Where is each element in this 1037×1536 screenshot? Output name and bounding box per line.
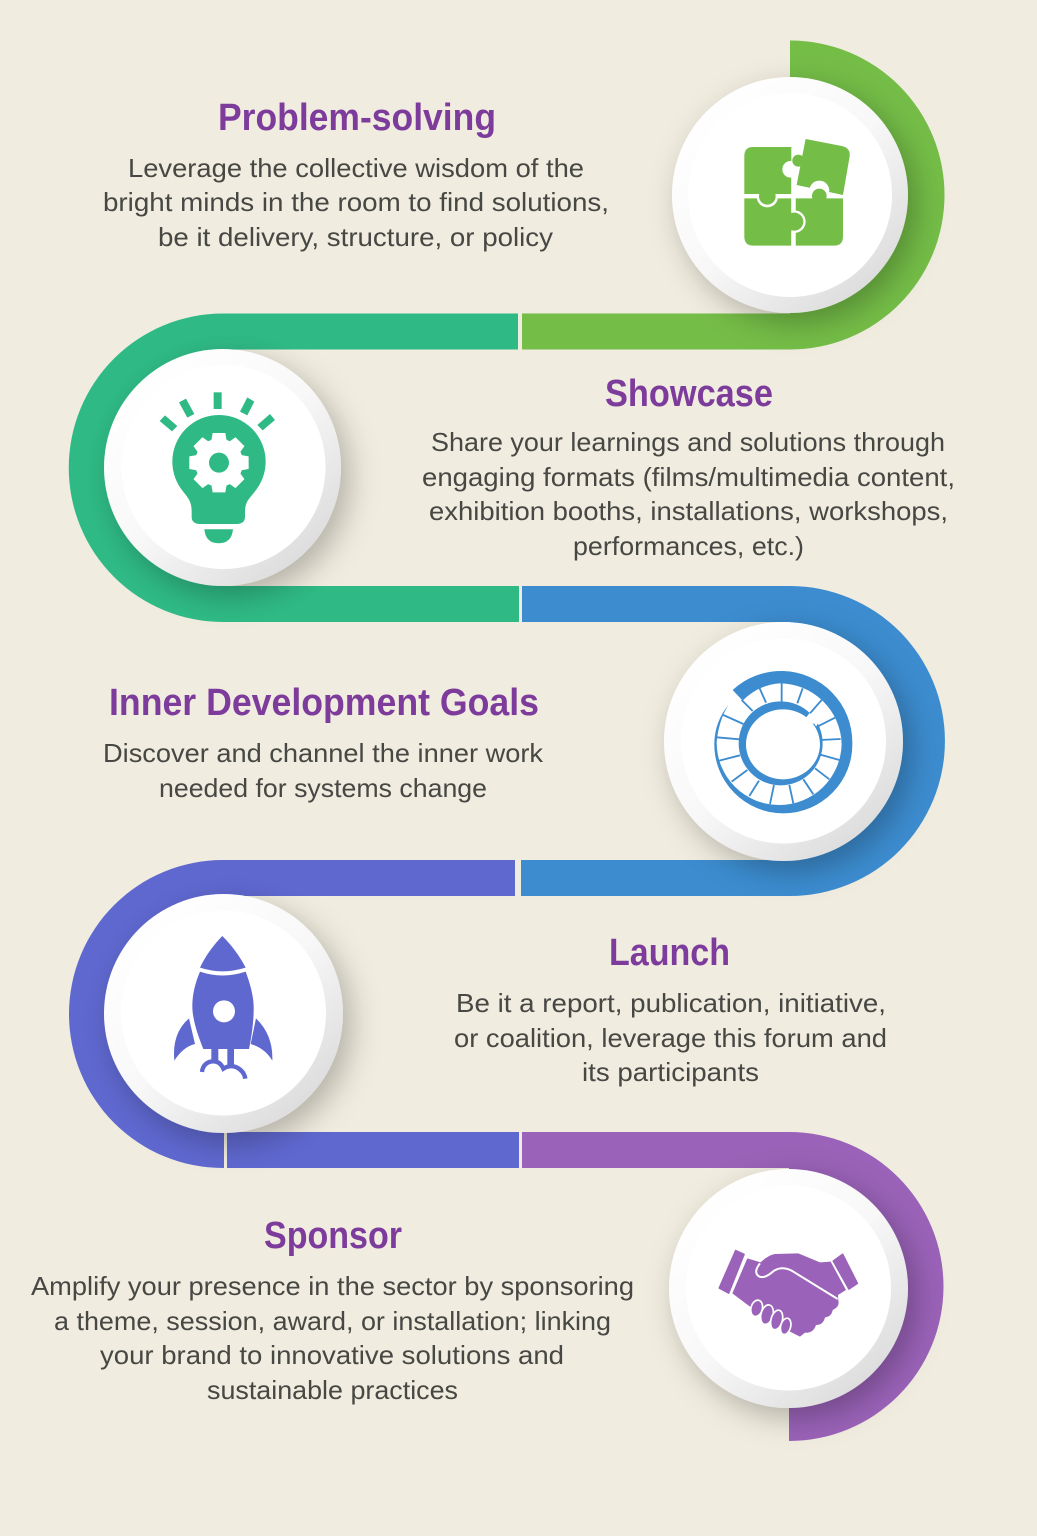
body: sponsor: [31, 1271, 634, 1405]
body: sponsor: Amplify your presence in the sector by sponsoring: [31, 1271, 634, 1301]
body: showcase: Share your learnings and solutions through: [431, 427, 945, 457]
node: sponsor circle: [669, 1169, 908, 1408]
body: showcase: performances, etc.): [573, 531, 804, 561]
body: showcase: [422, 427, 955, 561]
body: problem-solving: Leverage the collective wisdom of the: [128, 153, 584, 183]
text block: launch: [454, 932, 887, 1087]
body: launch: its participants: [582, 1057, 759, 1087]
heading: problem-solving: Problem-solving: [218, 97, 496, 139]
heading: showcase: Showcase: [605, 373, 773, 415]
body: problem-solving: [103, 153, 609, 252]
node: inner development goals circle: [664, 622, 903, 861]
path segment: blue: [521, 586, 945, 896]
body: inner development goals: [103, 738, 544, 803]
path segment: green: [522, 40, 945, 350]
heading: launch: Launch: [609, 932, 730, 974]
node: launch circle: [104, 894, 343, 1133]
path segment: purple: [522, 1132, 944, 1441]
path segment: indigo: [69, 860, 519, 1168]
body: launch: [454, 988, 887, 1087]
body: inner development goals: Discover and channel the inner work: [103, 738, 544, 768]
body: launch: or coalition, leverage this forum and: [454, 1023, 887, 1053]
body: problem-solving: be it delivery, structure, or policy: [158, 222, 553, 252]
body: showcase: exhibition booths, installations, workshops,: [429, 496, 948, 526]
heading: sponsor: Sponsor: [264, 1215, 402, 1257]
icon: light bulb with gear: [160, 392, 275, 543]
icon: puzzle: [744, 139, 850, 246]
body: sponsor: sustainable practices: [207, 1375, 458, 1405]
icon: rocket: [174, 936, 272, 1079]
body: problem-solving: bright minds in the room to find solutions,: [103, 187, 609, 217]
text block: problem-solving: [103, 97, 609, 252]
text block: showcase: [422, 373, 955, 561]
body: sponsor: a theme, session, award, or installation; linking: [54, 1306, 611, 1336]
body: inner development goals: needed for systems change: [159, 773, 487, 803]
node: problem-solving circle: [672, 77, 908, 313]
body: showcase: engaging formats (films/multimedia content,: [422, 462, 955, 492]
icon: handshake: [719, 1251, 857, 1337]
body: launch: Be it a report, publication, initiative,: [456, 988, 886, 1018]
heading: inner development goals: Inner Development Goals: [109, 682, 539, 724]
node: showcase circle: [104, 349, 341, 586]
text block: inner development goals: [103, 682, 544, 803]
path segment: teal: [69, 314, 519, 622]
icon: spiral ring: [714, 671, 852, 813]
body: sponsor: your brand to innovative solutions and: [100, 1340, 564, 1370]
text block: sponsor: [31, 1215, 634, 1405]
